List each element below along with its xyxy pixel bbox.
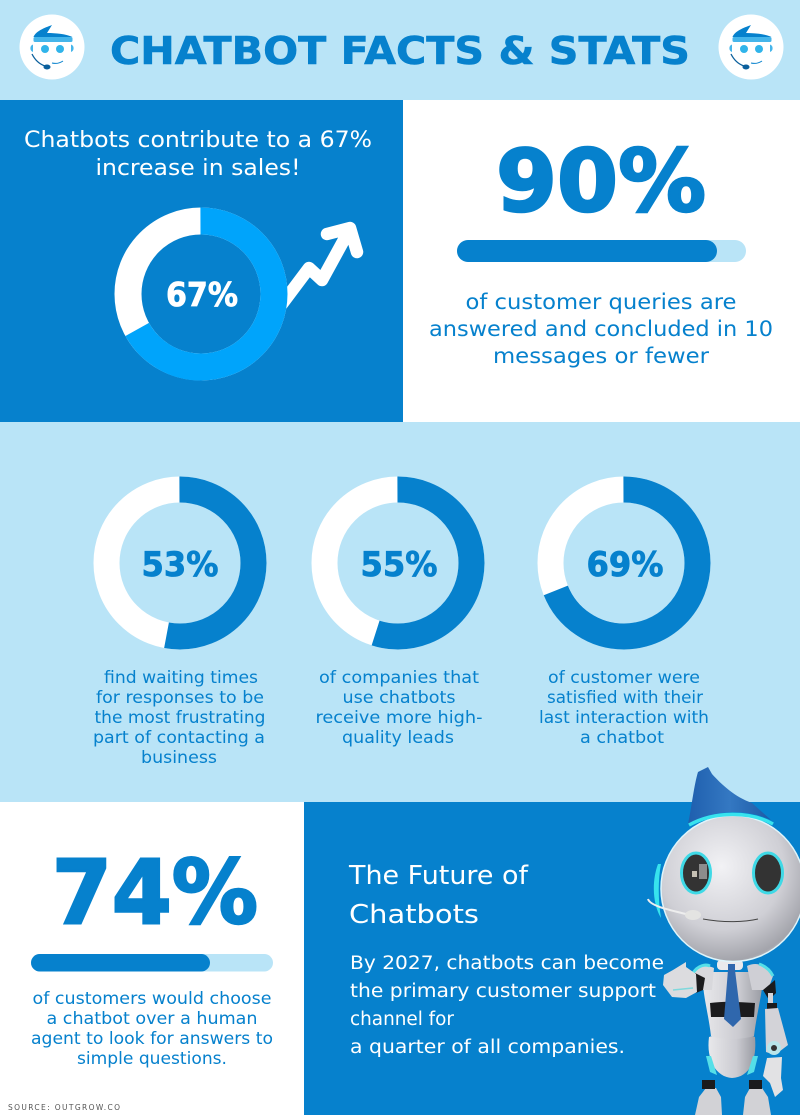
donut chart: 55% bbox=[324, 490, 472, 636]
progress bar: 90% bbox=[457, 240, 746, 262]
shoulders bbox=[693, 966, 714, 990]
69% description bbox=[539, 668, 709, 747]
55% description: quality leads bbox=[342, 728, 454, 747]
donut chart: 69% bbox=[550, 490, 698, 636]
53% description: find waiting times bbox=[104, 668, 258, 687]
icon: rising arrow bbox=[282, 228, 357, 304]
donut chart: 67%: 67% bbox=[166, 275, 238, 314]
left arm and hand bbox=[695, 973, 705, 993]
sales heading: Chatbots contribute to a 67% bbox=[24, 128, 372, 153]
53% description: for responses to be bbox=[96, 688, 264, 707]
panel: future of chatbots bbox=[304, 802, 800, 1115]
future body: By 2027, chatbots can become bbox=[350, 953, 664, 974]
panel: three donut stats bbox=[93, 490, 709, 767]
55% description: use chatbots bbox=[342, 688, 456, 707]
53% description: the most frustrating bbox=[94, 708, 266, 727]
headband bbox=[689, 814, 773, 825]
future heading bbox=[348, 861, 529, 930]
panel: sales increase bbox=[0, 100, 403, 422]
55% description bbox=[316, 668, 483, 747]
panel: 90 percent bbox=[403, 100, 800, 422]
torso bbox=[703, 972, 763, 1039]
sales heading: increase in sales! bbox=[96, 156, 300, 181]
53% description bbox=[93, 668, 266, 767]
hair bbox=[688, 767, 771, 824]
74% description: of customers would choose bbox=[32, 989, 272, 1008]
90% description: of customer queries are bbox=[466, 290, 736, 315]
74% description: simple questions. bbox=[77, 1049, 227, 1068]
right arm bbox=[763, 980, 776, 1000]
53% description: business bbox=[141, 748, 217, 767]
collar bbox=[717, 960, 743, 970]
69% description: last interaction with bbox=[539, 708, 709, 727]
69% description: satisfied with their bbox=[547, 688, 703, 707]
stat: 74%: 74% bbox=[52, 841, 258, 944]
donut chart: 53% bbox=[106, 490, 254, 636]
source: SOURCE: OUTGROW.CO bbox=[8, 1103, 120, 1112]
future heading: Chatbots bbox=[349, 900, 479, 930]
pelvis bbox=[708, 1034, 755, 1078]
74% description bbox=[31, 989, 273, 1068]
ear bbox=[654, 864, 661, 918]
donut chart: 69%: 69% bbox=[586, 545, 664, 585]
55% description: receive more high- bbox=[316, 708, 483, 727]
panel: 74 percent bbox=[0, 802, 304, 1115]
donut chart: 53%: 53% bbox=[142, 545, 218, 585]
90% description: answered and concluded in 10 bbox=[429, 317, 773, 342]
progress bar: 74% bbox=[31, 954, 273, 972]
title: CHATBOT FACTS & STATS bbox=[110, 29, 690, 74]
90% description bbox=[429, 290, 773, 369]
header band bbox=[20, 14, 784, 80]
55% description: of companies that bbox=[319, 668, 480, 687]
90% description: messages or fewer bbox=[493, 344, 709, 369]
future body: channel for bbox=[350, 1009, 454, 1030]
legs bbox=[695, 1088, 771, 1115]
future heading: The Future of bbox=[348, 861, 529, 891]
future body: a quarter of all companies. bbox=[350, 1037, 625, 1058]
69% description: a chatbot bbox=[580, 728, 665, 747]
sales heading bbox=[24, 128, 372, 181]
53% description: part of contacting a bbox=[93, 728, 265, 747]
future body bbox=[350, 953, 664, 1058]
icon: chatbot right bbox=[718, 14, 784, 80]
donut chart: 67% bbox=[128, 221, 274, 367]
74% description: a chatbot over a human bbox=[46, 1009, 258, 1028]
tie bbox=[724, 964, 741, 1027]
head bbox=[661, 816, 800, 962]
eyes bbox=[682, 853, 710, 893]
icon: chatbot left bbox=[20, 14, 84, 80]
illustration: robot bbox=[648, 767, 800, 1115]
stat: 90%: 90% bbox=[496, 132, 706, 232]
donut chart: 55%: 55% bbox=[360, 545, 438, 585]
69% description: of customer were bbox=[548, 668, 700, 687]
future body: the primary customer support bbox=[350, 981, 656, 1002]
74% description: agent to look for answers to bbox=[31, 1029, 273, 1048]
mouth and microphone bbox=[703, 919, 758, 922]
